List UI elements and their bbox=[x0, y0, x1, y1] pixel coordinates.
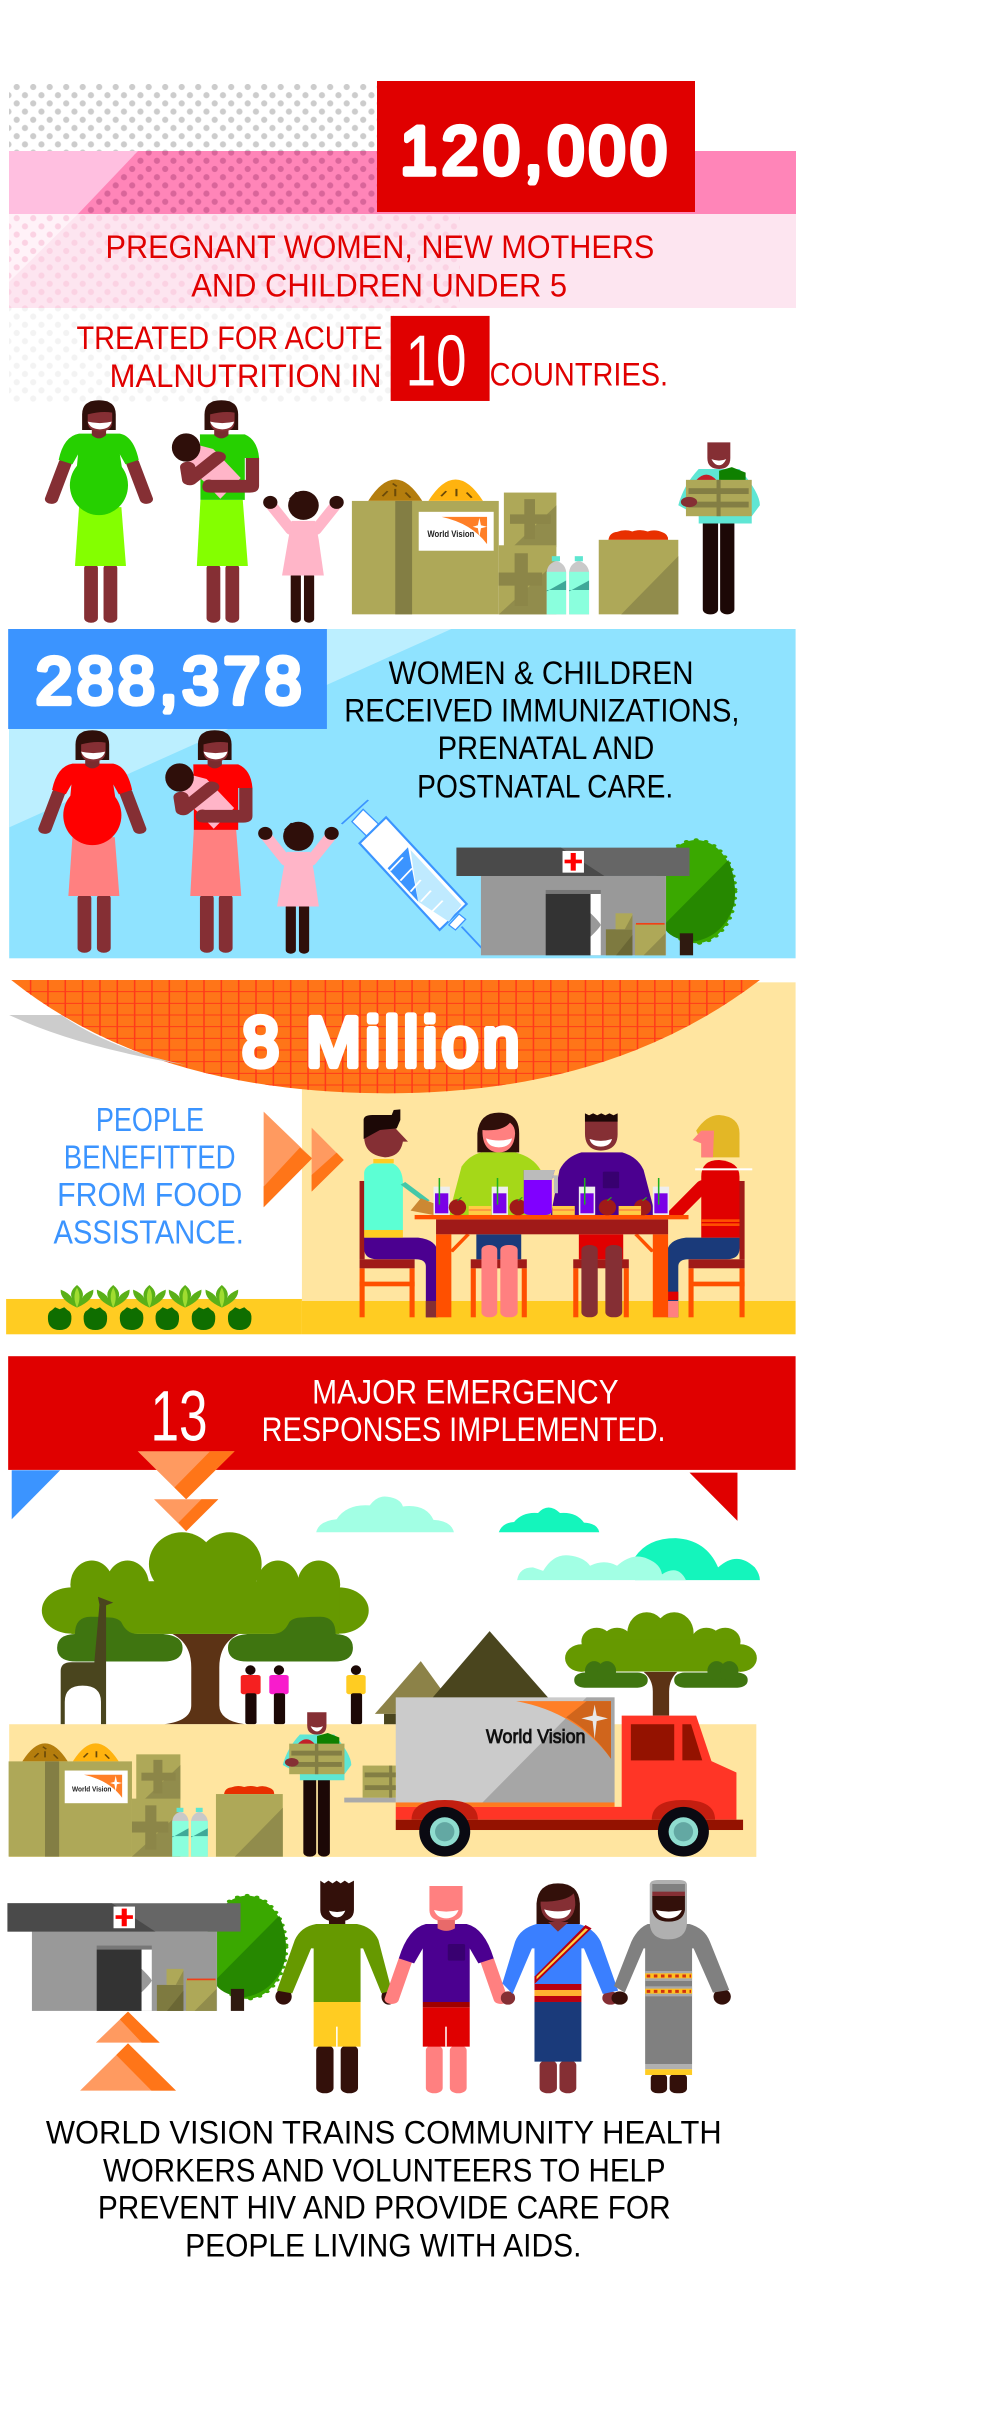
clouds bbox=[316, 1497, 760, 1580]
text: people benefitted: PEOPLE bbox=[96, 1102, 204, 1139]
text: pregnant women: AND CHILDREN UNDER 5 bbox=[191, 268, 567, 304]
table bbox=[415, 1215, 688, 1317]
orange triangles pointing up bbox=[80, 2012, 176, 2091]
text: world vision trains: PEOPLE LIVING WITH AIDS. bbox=[185, 2228, 581, 2264]
giraffe bbox=[61, 1597, 113, 1724]
huts bbox=[375, 1631, 548, 1714]
figure: child bbox=[258, 822, 339, 954]
red box with 10 bbox=[391, 316, 490, 401]
text: major emergency responses: MAJOR EMERGENCY bbox=[312, 1374, 619, 1412]
text: pregnant women bbox=[106, 229, 654, 304]
text: pregnant women: PREGNANT WOMEN, NEW MOTHERS bbox=[106, 229, 654, 265]
figure: mother with baby green bbox=[172, 400, 259, 623]
text: treated for acute malnutrition bbox=[76, 320, 382, 395]
big number 120,000: 120,000 bbox=[400, 113, 672, 189]
small people bbox=[241, 1665, 366, 1724]
text: women and children received: WOMEN & CHILDREN bbox=[389, 655, 694, 691]
truck bbox=[344, 1697, 743, 1857]
person: woman in blue top bbox=[501, 1883, 619, 2093]
text: people benefitted bbox=[54, 1102, 244, 1251]
person: man in grey robe bbox=[611, 1880, 731, 2093]
icon: clinic building bbox=[456, 840, 735, 955]
big tree bbox=[42, 1532, 369, 1724]
text: treated for acute malnutrition: TREATED FOR ACUTE bbox=[76, 320, 382, 356]
figure: pregnant woman green bbox=[52, 400, 146, 623]
big text 8 Million: 8 Million bbox=[242, 1003, 524, 1081]
food boxes, water and aid worker bbox=[352, 442, 760, 614]
person 4 bbox=[667, 1115, 752, 1317]
text: women and children received: POSTNATAL CARE. bbox=[417, 769, 673, 804]
section: immunizations panel bbox=[8, 629, 796, 958]
figure: child bbox=[263, 491, 344, 623]
cream panel bbox=[302, 982, 796, 1301]
sand ground bbox=[9, 1724, 756, 1857]
pink band bbox=[9, 151, 796, 214]
text: world vision trains bbox=[46, 2115, 722, 2264]
plants row bbox=[48, 1285, 251, 1330]
person 1 bbox=[364, 1109, 438, 1317]
arrows pointing right bbox=[264, 1112, 344, 1207]
blue number box 288,378: 288,378 bbox=[36, 645, 306, 718]
section: health workers bbox=[46, 1880, 731, 2264]
yellow ground bbox=[6, 1299, 796, 1334]
section: emergency responses bbox=[8, 1356, 796, 1857]
text: people benefitted: FROM FOOD bbox=[57, 1177, 242, 1214]
figure: mother with baby red bbox=[165, 730, 252, 953]
red number box bbox=[377, 81, 695, 212]
icon: syringe bbox=[342, 800, 483, 950]
section: 120,000 header band bbox=[9, 81, 796, 402]
text: major emergency responses bbox=[262, 1374, 666, 1449]
pale pink band bbox=[9, 214, 796, 308]
icon: clinic building bbox=[7, 1896, 286, 2011]
hut post bbox=[384, 1714, 397, 1724]
section: food assistance bbox=[6, 980, 796, 1334]
truck: World Vision bbox=[486, 1727, 585, 1748]
text: major emergency responses: RESPONSES IMPLEMENTED. bbox=[262, 1411, 666, 1449]
red pennant bbox=[690, 1473, 737, 1521]
text: people benefitted: ASSISTANCE. bbox=[54, 1214, 244, 1251]
red banner bbox=[8, 1356, 796, 1470]
panel background bbox=[9, 629, 796, 958]
blue pennant bbox=[12, 1470, 60, 1519]
faint dots bbox=[9, 308, 394, 402]
text: people benefitted: BENEFITTED bbox=[64, 1139, 236, 1176]
person: man in green shirt bbox=[275, 1881, 396, 2093]
figure: pregnant woman red bbox=[45, 730, 140, 953]
section 1 text bbox=[76, 113, 672, 401]
text: treated for acute malnutrition: MALNUTRITION IN bbox=[110, 358, 381, 395]
person: man in purple shirt bbox=[392, 1886, 501, 2093]
orange gingham dome bbox=[11, 980, 760, 1093]
person 2 bbox=[449, 1113, 551, 1317]
text: women and children received bbox=[344, 655, 740, 804]
red box with 10: 10 bbox=[405, 320, 467, 401]
grey page curl bbox=[9, 1015, 186, 1065]
dot pattern background bbox=[9, 84, 377, 151]
orange triangles pointing down bbox=[138, 1451, 235, 1531]
table items bbox=[434, 1170, 669, 1215]
text: countries: COUNTRIES. bbox=[490, 357, 668, 393]
small tree bbox=[565, 1612, 757, 1716]
section: emergency responses: 13 bbox=[150, 1376, 208, 1456]
chairs bbox=[360, 1181, 745, 1317]
person 3 bbox=[551, 1113, 655, 1317]
food boxes, water and aid worker bbox=[9, 1712, 351, 1857]
blue number box 288,378 bbox=[8, 629, 327, 729]
text: women and children received: PRENATAL AND bbox=[438, 730, 654, 766]
